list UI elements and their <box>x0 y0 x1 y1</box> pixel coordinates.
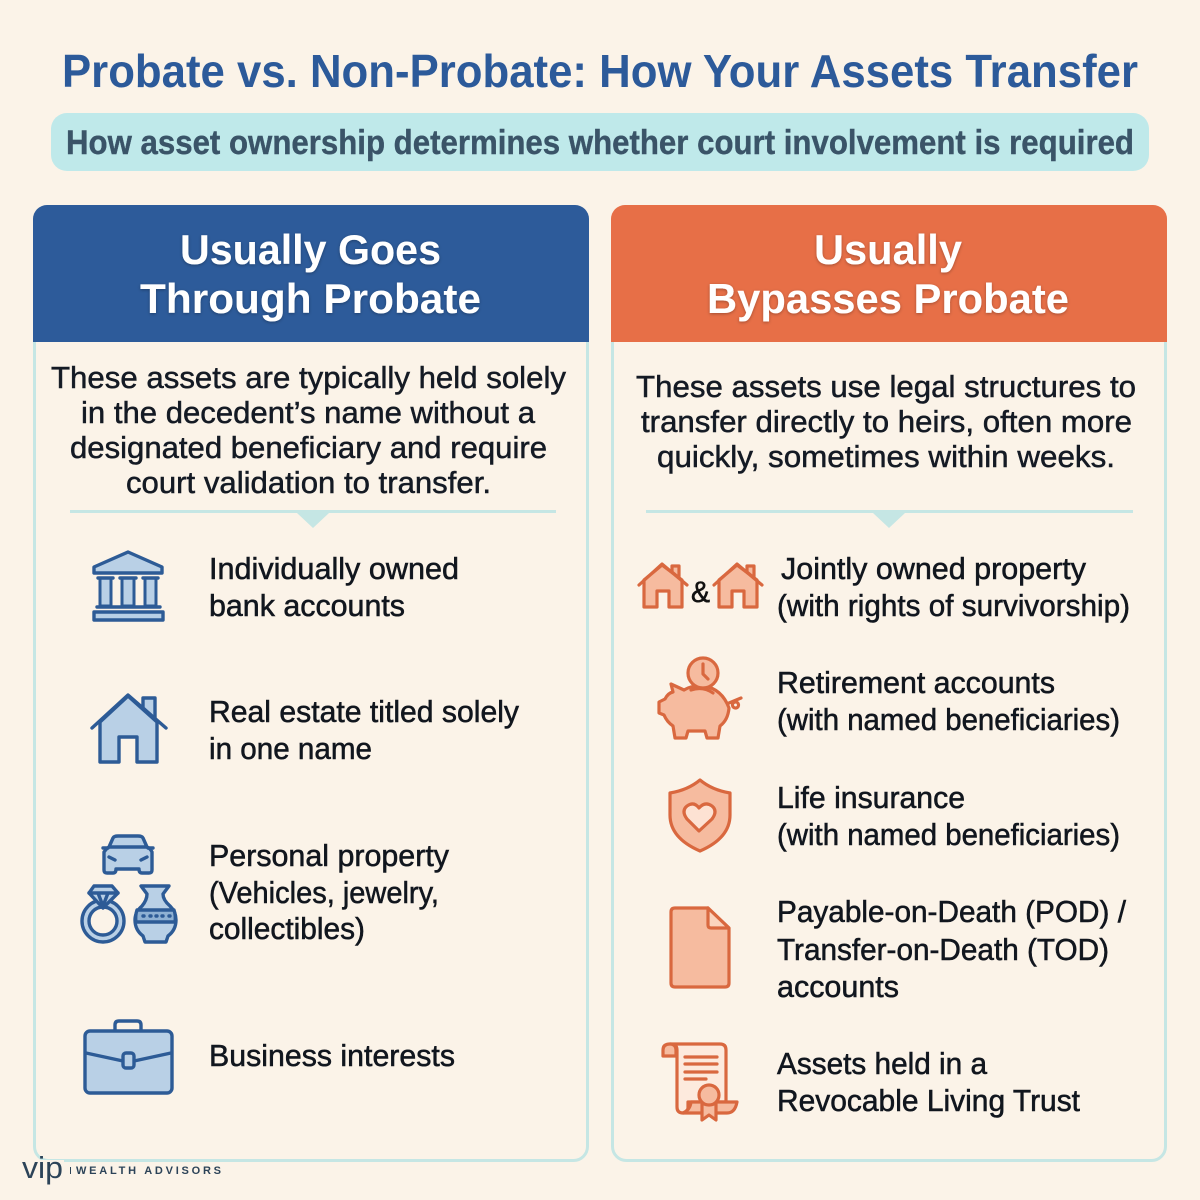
intro text: probate: in the decedent’s name without a <box>81 395 536 430</box>
intro text: bypass: These assets use legal structures to <box>636 369 1136 404</box>
subtitle banner <box>51 113 1149 171</box>
house one <box>639 564 687 607</box>
intro text: bypass <box>636 369 1136 474</box>
intro text: bypass: quickly, sometimes within weeks. <box>657 439 1115 474</box>
divider pointer: probate <box>297 513 329 528</box>
item: POD TOD: accounts <box>777 969 899 1004</box>
icon: house <box>92 695 166 762</box>
item: retirement: Retirement accounts <box>777 665 1055 700</box>
icon: car <box>103 836 153 873</box>
icon: document <box>671 908 729 987</box>
icon: ring <box>82 886 124 942</box>
item: bank accounts: Individually owned <box>209 551 459 586</box>
item: bank accounts: bank accounts <box>209 588 405 623</box>
item: living trust: Assets held in a <box>777 1046 988 1081</box>
panel header: bypass <box>611 205 1167 342</box>
item: real estate: Real estate titled solely <box>209 694 519 729</box>
divider pointer: bypass <box>873 513 905 528</box>
logo: VIP Wealth Advisors <box>20 1150 221 1185</box>
item: POD TOD: Payable-on-Death (POD) / <box>777 894 1126 929</box>
intro text: probate: These assets are typically held solely <box>51 360 566 395</box>
item: real estate: in one name <box>209 731 372 766</box>
icon: shield with heart <box>670 780 730 851</box>
intro text: probate: designated beneficiary and require <box>70 430 547 465</box>
item: POD TOD <box>777 894 1126 1004</box>
intro text: probate <box>51 360 566 500</box>
icon: briefcase <box>85 1021 172 1093</box>
icon: trust scroll <box>663 1044 737 1120</box>
house two <box>714 564 762 607</box>
item: bank accounts <box>209 551 459 623</box>
intro text: probate: court validation to transfer. <box>126 465 491 500</box>
item: living trust: Revocable Living Trust <box>777 1083 1080 1118</box>
item: real estate <box>209 694 519 766</box>
logo: VIP Wealth Advisors: vip <box>22 1150 63 1185</box>
title: Probate vs. Non-Probate: How Your Assets Transfer <box>62 45 1138 97</box>
item: personal property <box>209 838 449 946</box>
item: POD TOD: Transfer-on-Death (TOD) <box>777 932 1109 967</box>
item: life insurance: Life insurance <box>777 780 965 815</box>
subtitle banner: How asset ownership determines whether court involvement is required <box>66 124 1134 162</box>
ampersand: & <box>691 576 710 609</box>
panel header: probate <box>33 205 589 342</box>
panel header: probate: Through Probate <box>140 275 481 322</box>
intro text: bypass: transfer directly to heirs, often more <box>641 404 1132 439</box>
icon: two houses <box>639 564 762 609</box>
item: living trust <box>777 1046 1080 1118</box>
item: business interests: Business interests <box>209 1038 455 1073</box>
item: retirement <box>777 665 1120 737</box>
icon: bank <box>94 552 163 620</box>
item: life insurance <box>777 780 1120 852</box>
item: personal property: Personal property <box>209 838 449 873</box>
icon: vase <box>135 886 176 942</box>
item: retirement: (with named beneficiaries) <box>777 702 1120 737</box>
logo: VIP Wealth Advisors: WEALTH ADVISORS <box>76 1165 221 1177</box>
item: personal property: (Vehicles, jewelry, <box>209 875 439 910</box>
item: life insurance: (with named beneficiaries) <box>777 817 1120 852</box>
panel header: probate: Usually Goes <box>180 226 441 273</box>
item: jointly owned <box>777 551 1130 623</box>
panel header: bypass: Bypasses Probate <box>707 275 1069 322</box>
item: jointly owned: (with rights of survivorship) <box>777 588 1130 623</box>
panel: usually bypasses probate <box>611 205 1167 1160</box>
panel: usually goes through probate <box>33 205 589 1160</box>
icon: piggy bank <box>659 658 741 738</box>
item: personal property: collectibles) <box>209 911 365 946</box>
panel header: bypass: Usually <box>814 226 963 273</box>
item: jointly owned: Jointly owned property <box>781 551 1086 586</box>
